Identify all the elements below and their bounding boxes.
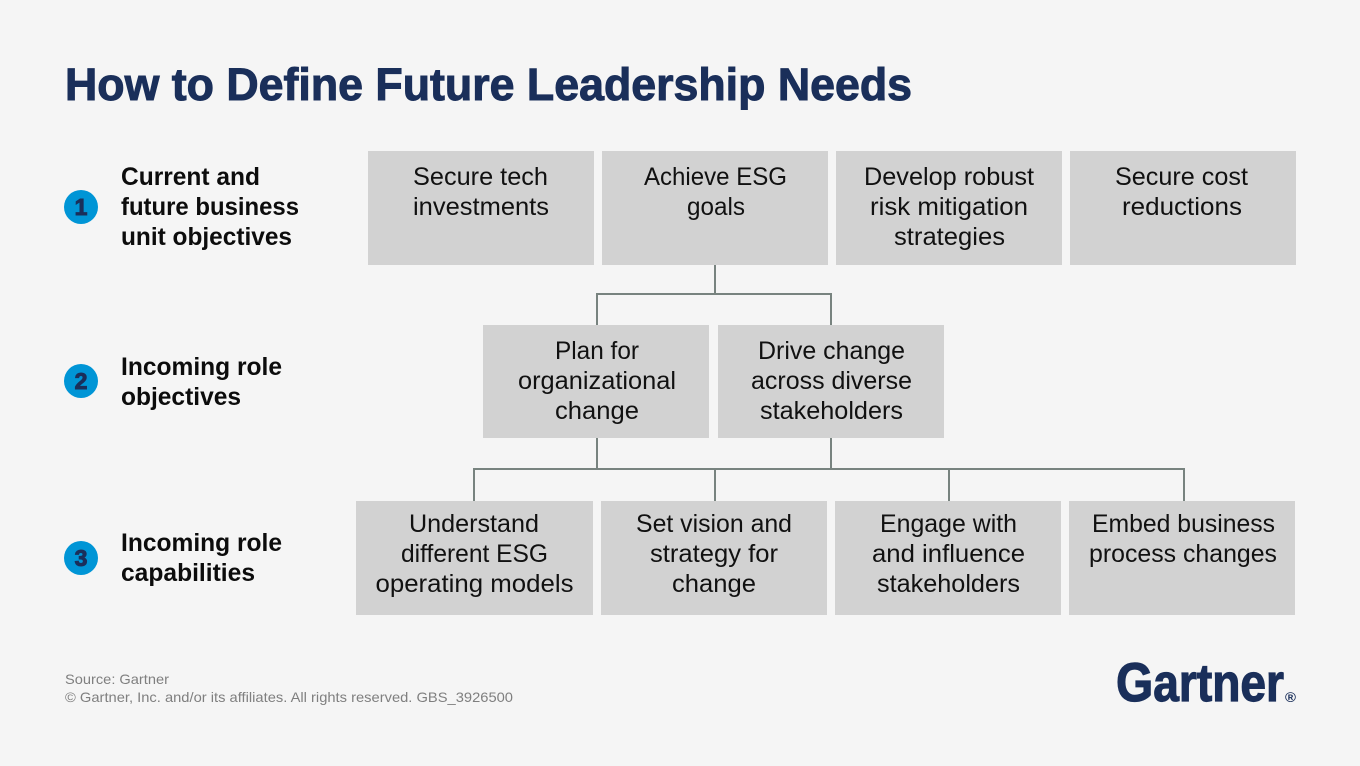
box: plan for organizational change bbox=[483, 325, 709, 438]
box: understand different ESG operating models: Understand bbox=[409, 510, 539, 538]
step badge 2: 2 bbox=[75, 368, 87, 394]
box: plan for organizational change: change bbox=[555, 397, 639, 425]
row 1 heading: future business bbox=[121, 193, 299, 221]
row 1 heading: Current and bbox=[121, 163, 260, 191]
row 3 heading bbox=[121, 529, 282, 587]
box: engage with and influence stakeholders bbox=[835, 501, 1061, 615]
step badge 3: 3 bbox=[75, 545, 87, 571]
box: set vision and strategy for change bbox=[601, 501, 827, 615]
row 1 heading: unit objectives bbox=[121, 223, 292, 251]
row 1 label: current and future business unit objectives bbox=[64, 163, 299, 251]
box: secure cost reductions bbox=[1070, 151, 1296, 265]
box: embed business process changes: process changes bbox=[1089, 540, 1277, 568]
box: understand different ESG operating models: operating models bbox=[376, 570, 574, 598]
box: secure tech investments bbox=[368, 151, 594, 265]
box: set vision and strategy for change: strategy for bbox=[650, 540, 778, 568]
box: achieve ESG goals: goals bbox=[687, 193, 745, 221]
source and copyright note bbox=[65, 671, 513, 705]
row 3 heading: capabilities bbox=[121, 559, 255, 587]
row 2 label: incoming role objectives bbox=[64, 353, 282, 411]
box: engage with and influence stakeholders: stakeholders bbox=[877, 570, 1020, 598]
title: How to Define Future Leadership Needs bbox=[65, 59, 912, 110]
box: embed business process changes: Embed business bbox=[1092, 510, 1275, 538]
step badge 1 bbox=[64, 190, 98, 224]
row 2 heading: objectives bbox=[121, 383, 241, 411]
row 1 heading bbox=[121, 163, 299, 251]
step badge 2 bbox=[64, 364, 98, 398]
box: set vision and strategy for change: change bbox=[672, 570, 756, 598]
Gartner logo: ® bbox=[1285, 689, 1297, 705]
box: develop robust risk mitigation strategies: strategies bbox=[894, 223, 1005, 251]
box: develop robust risk mitigation strategies bbox=[836, 151, 1062, 265]
box: achieve ESG goals bbox=[602, 151, 828, 265]
Gartner logo: Gartner bbox=[1116, 651, 1284, 713]
source and copyright note: © Gartner, Inc. and/or its affiliates. All rights reserved. GBS_3926500 bbox=[65, 689, 513, 705]
box: embed business process changes bbox=[1069, 501, 1295, 615]
box: secure cost reductions: Secure cost bbox=[1115, 163, 1248, 191]
box: set vision and strategy for change: Set vision and bbox=[636, 510, 792, 538]
box: secure tech investments: investments bbox=[413, 193, 549, 221]
step badge 1: 1 bbox=[75, 194, 88, 220]
box: achieve ESG goals: Achieve ESG bbox=[644, 163, 787, 191]
box: understand different ESG operating models bbox=[356, 501, 593, 615]
box: drive change across diverse stakeholders bbox=[718, 325, 944, 438]
row 2 heading: Incoming role bbox=[121, 353, 282, 381]
row 3 heading: Incoming role bbox=[121, 529, 282, 557]
connector: role objectives to capabilities bbox=[474, 438, 1184, 501]
box: plan for organizational change: organizational bbox=[518, 367, 676, 395]
row 3 label: incoming role capabilities bbox=[64, 529, 282, 587]
row 2 heading bbox=[121, 353, 282, 411]
box: engage with and influence stakeholders: and influence bbox=[872, 540, 1025, 568]
step badge 3 bbox=[64, 541, 98, 575]
box: understand different ESG operating models: different ESG bbox=[401, 540, 548, 568]
box: drive change across diverse stakeholders: Drive change bbox=[758, 337, 905, 365]
box: develop robust risk mitigation strategies: Develop robust bbox=[864, 163, 1034, 191]
box: drive change across diverse stakeholders: stakeholders bbox=[760, 397, 903, 425]
box: drive change across diverse stakeholders: across diverse bbox=[751, 367, 912, 395]
box: engage with and influence stakeholders: Engage with bbox=[880, 510, 1017, 538]
source and copyright note: Source: Gartner bbox=[65, 671, 169, 687]
connector: ESG goals to role objectives bbox=[597, 265, 831, 325]
box: secure tech investments: Secure tech bbox=[413, 163, 548, 191]
box: secure cost reductions: reductions bbox=[1122, 193, 1242, 221]
box: develop robust risk mitigation strategies: risk mitigation bbox=[870, 193, 1028, 221]
box: plan for organizational change: Plan for bbox=[555, 337, 639, 365]
